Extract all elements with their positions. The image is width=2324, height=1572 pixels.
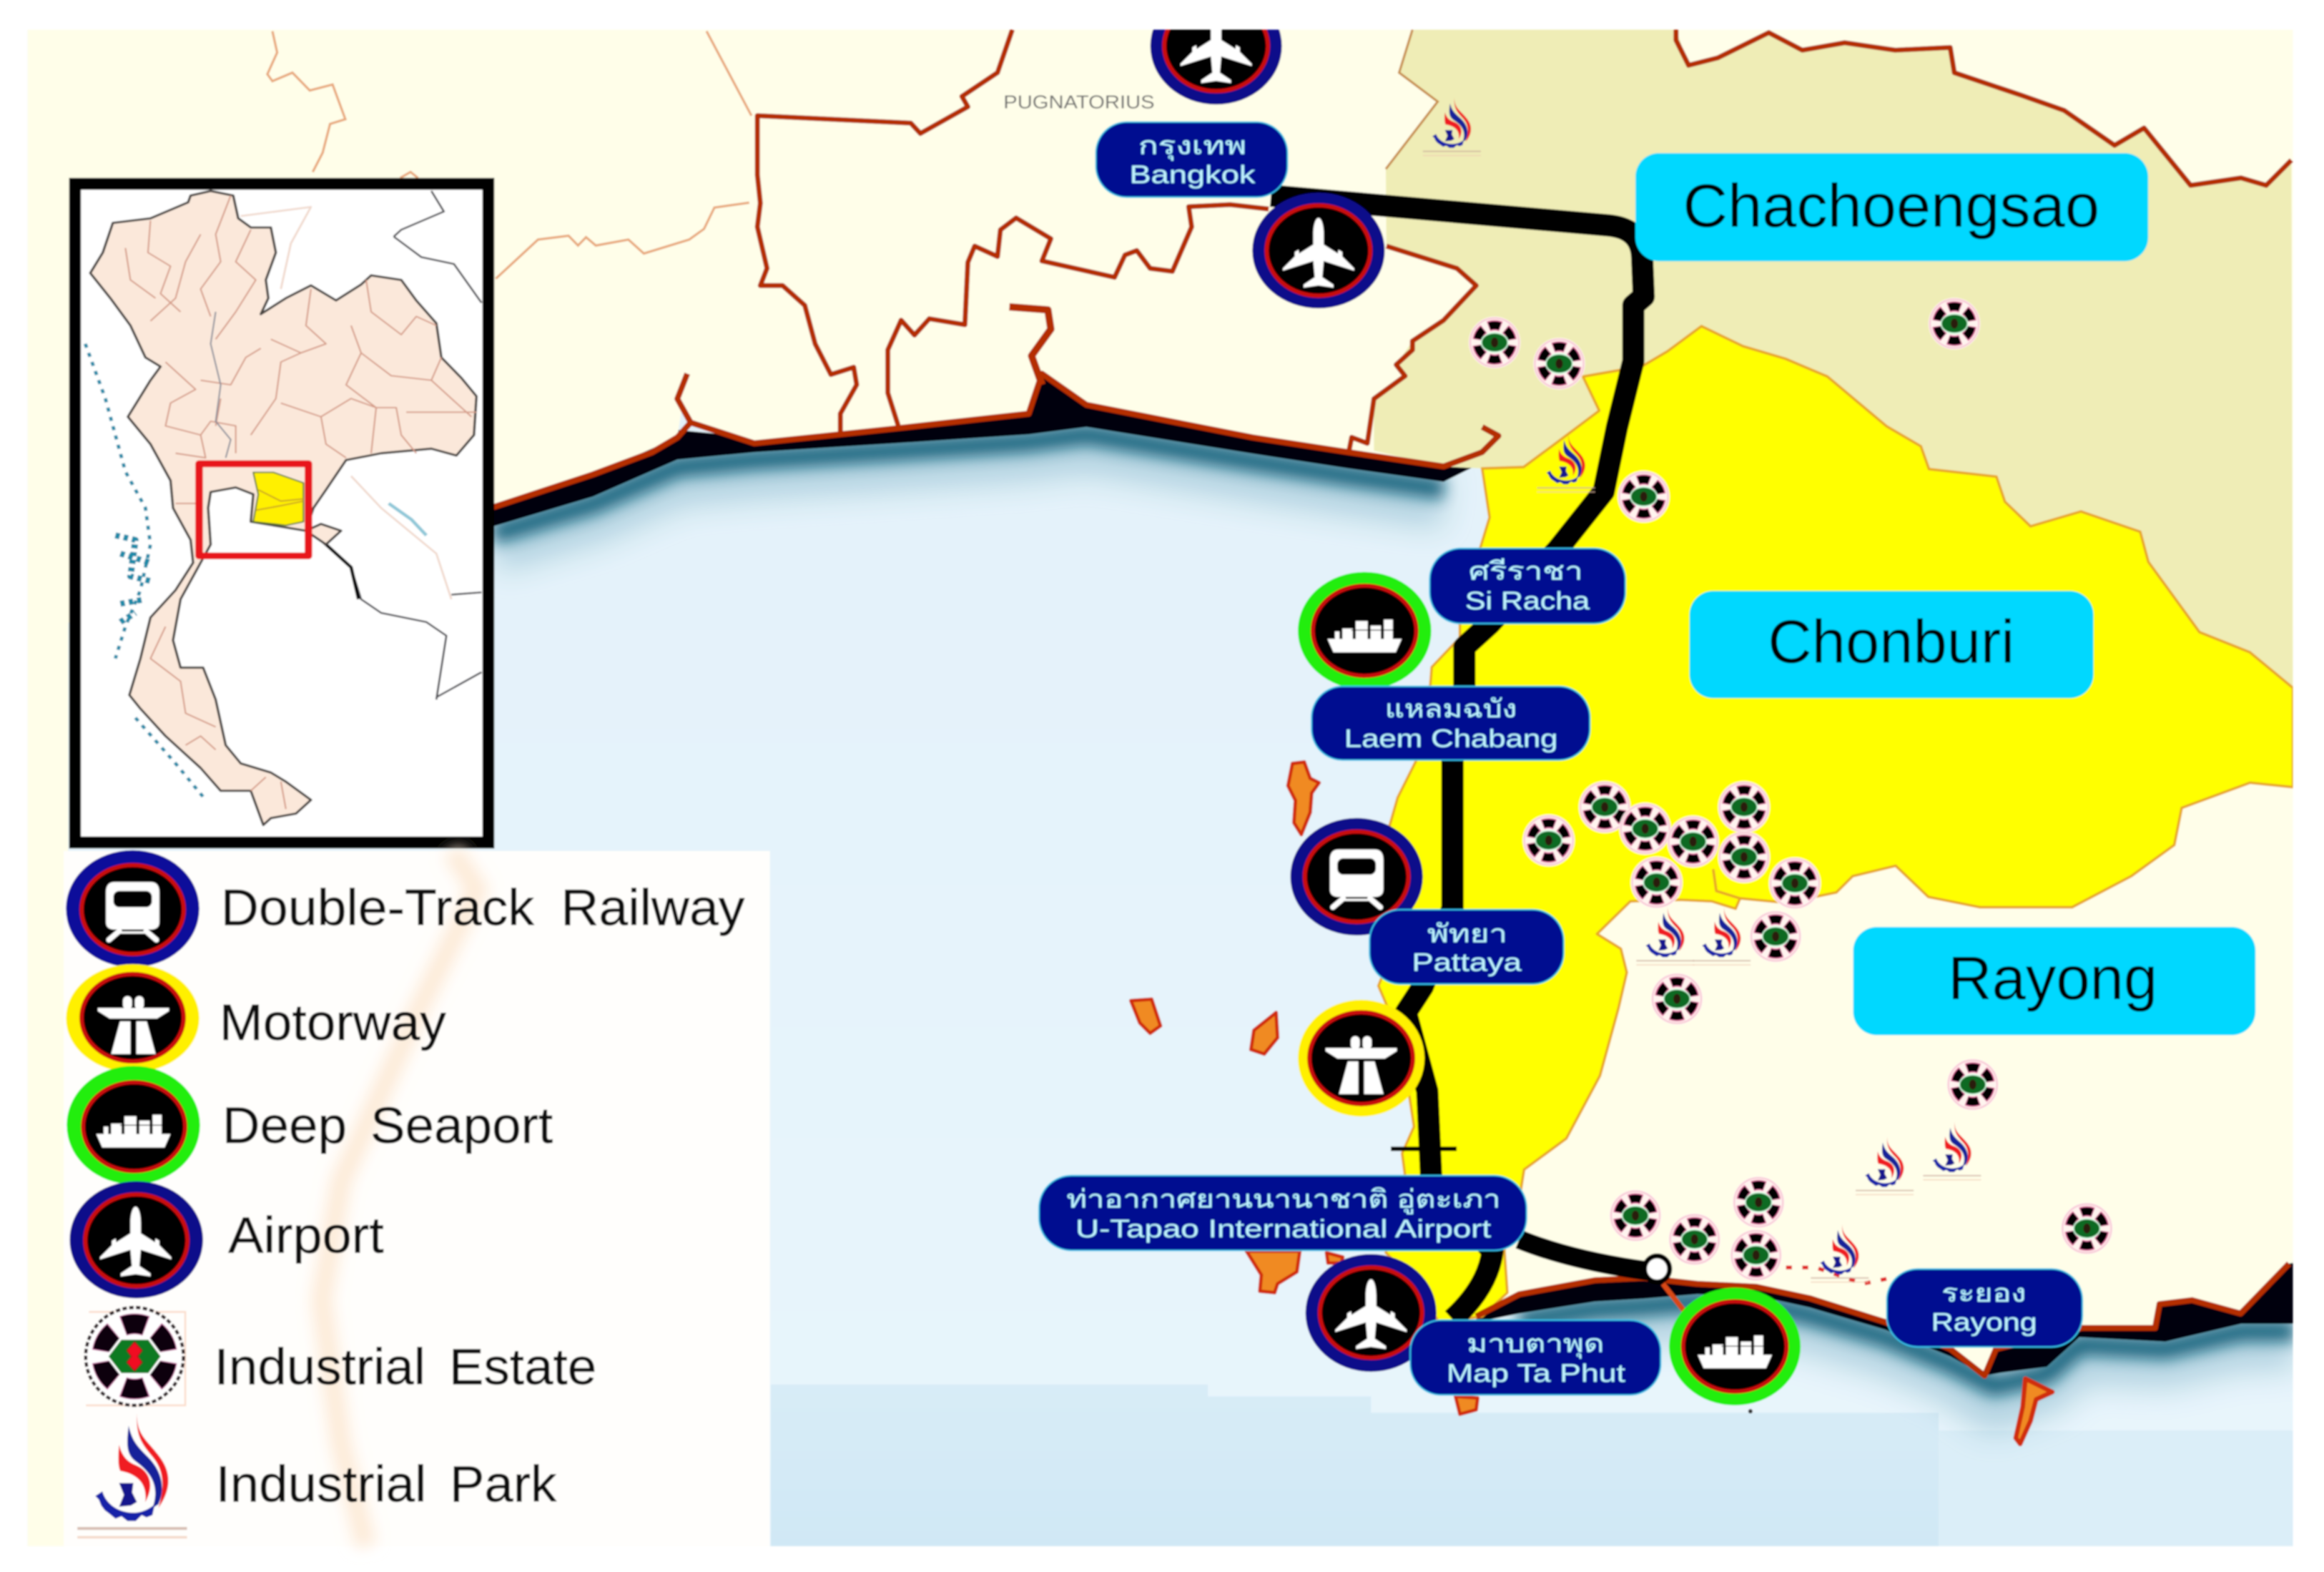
city label: Si Racha: Si Racha: [1465, 587, 1590, 615]
badge: airport U-Tapao: [1306, 1254, 1437, 1372]
coast wide shadow: [493, 448, 2295, 1407]
legend text: industrial estate: Industrial Estate: [215, 1338, 596, 1395]
inset: Andaman islands: [85, 344, 206, 800]
panel: legend: [64, 850, 770, 1546]
small dot: [1748, 1409, 1753, 1413]
province label: Chachoengsao: [1635, 153, 2148, 261]
city label: U-Tapao International Airport: U-Tapao International Airport: [1075, 1215, 1491, 1243]
inset: Thailand outline: [90, 191, 476, 825]
province: Chachoengsao: [1374, 30, 2293, 688]
province boundaries: [757, 30, 2291, 452]
railway line: [1271, 196, 1644, 1320]
south coast black band: [1476, 1260, 2298, 1376]
legend text: seaport: Deep Seaport: [222, 1097, 553, 1154]
city label: Bangkok: [1096, 122, 1288, 197]
province label: Chonburi: Chonburi: [1768, 609, 2014, 677]
railway junction: [1645, 1256, 1670, 1282]
legend icon: motorway: [66, 964, 200, 1072]
islands: [1131, 762, 2052, 1444]
province label: Rayong: [1853, 927, 2255, 1035]
city label: Map Ta Phut: [1410, 1320, 1660, 1395]
inset: central river: [211, 312, 231, 458]
legend text: industrial park: Industrial Park: [216, 1455, 557, 1513]
city label: Pattaya: พัทยา: [1427, 920, 1507, 948]
map label: Pugnatorius: PUGNATORIUS: [1003, 92, 1155, 112]
north coast black band: [492, 377, 1472, 526]
city label: Bangkok: Bangkok: [1129, 161, 1256, 189]
red dashes near coast: [1786, 1267, 1891, 1284]
province: Chonburi: [1379, 326, 2293, 1322]
badge: seaport Laem Chabang: [1298, 572, 1432, 689]
legend icon: seaport: [67, 1066, 200, 1184]
city label: U-Tapao International Airport: [1039, 1176, 1527, 1250]
city label: Map Ta Phut: Map Ta Phut: [1447, 1360, 1625, 1387]
inset: lake: [389, 503, 426, 536]
city label: Pattaya: Pattaya: [1412, 949, 1522, 977]
railway crossing: [1391, 1148, 1457, 1150]
badge: motorway: [1298, 1000, 1424, 1116]
city label: Rayong: [1887, 1269, 2082, 1347]
city label: Rayong: Rayong: [1931, 1309, 2037, 1337]
legend icon: industrial estate: [86, 1307, 185, 1405]
badge: airport Bangkok: [1252, 193, 1385, 308]
city label: Bangkok: กรุงเทพ: [1138, 132, 1246, 161]
legend text: motorway: Motorway: [220, 994, 446, 1051]
inset: neighbouring borders: [241, 191, 481, 699]
province label: Chonburi: [1690, 591, 2094, 698]
city label: U-Tapao International Airport: ท่าอากาศยานนานาชาติ อู่ตะเภา: [1067, 1185, 1500, 1214]
inset: province lines: [125, 195, 476, 809]
province label: Chachoengsao: Chachoengsao: [1683, 172, 2099, 240]
legend icon: airport: [69, 1182, 203, 1298]
thin boundary lines: [267, 31, 752, 279]
inset: highlighted provinces: [253, 473, 303, 526]
south coast line: [1476, 1264, 2289, 1376]
inset: red locator box: [199, 463, 308, 556]
province label: Rayong: Rayong: [1948, 945, 2157, 1013]
legend text: railway: Double-Track Railway: [221, 879, 745, 936]
inset: highlight lines: [256, 490, 303, 510]
city label: Laem Chabang: Laem Chabang: [1344, 725, 1557, 753]
legend icon: industrial park: [77, 1411, 187, 1538]
badge: railway: [1290, 818, 1423, 935]
legend icon: railway: [66, 850, 200, 967]
icons: industrial estates on map: [1469, 298, 2113, 1281]
sea: [68, 411, 2294, 1545]
deeper sea band east: [1939, 1430, 2293, 1546]
city label: Laem Chabang: แหลมฉบัง: [1385, 695, 1517, 723]
railway branch: [1520, 1239, 1655, 1272]
badge: seaport Map Ta Phut: [1669, 1287, 1801, 1405]
city label: Laem Chabang: [1311, 687, 1590, 760]
city label: Pattaya: [1369, 910, 1564, 984]
legend background coastline: [322, 851, 477, 1546]
badge: airport top: [1151, 0, 1282, 104]
legend text: airport: Airport: [228, 1207, 384, 1264]
icons: industrial parks on map: [1423, 97, 1981, 1282]
city label: Map Ta Phut: มาบตาพุด: [1467, 1330, 1604, 1358]
city label: Si Racha: [1429, 549, 1625, 624]
deeper sea band: [771, 1385, 1939, 1546]
panel: Thailand locator inset: [75, 184, 488, 843]
port connector: [1663, 1284, 1684, 1310]
city label: Si Racha: ศรีราชา: [1469, 557, 1583, 585]
city label: Rayong: ระยอง: [1941, 1279, 2026, 1307]
coast dark shadow: [493, 434, 2295, 1386]
north coast line: [493, 373, 1499, 507]
